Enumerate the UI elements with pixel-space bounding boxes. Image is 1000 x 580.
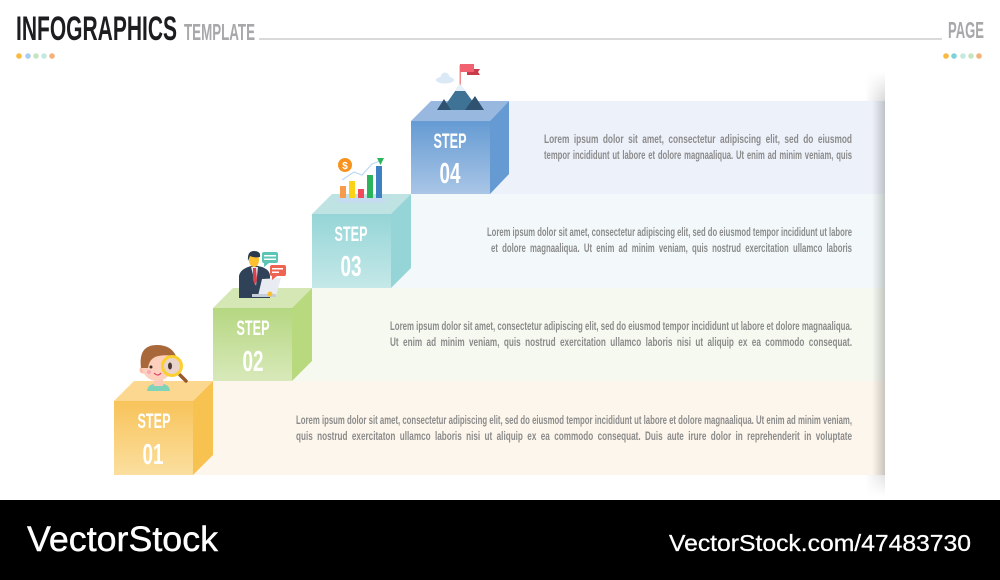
step 2 box: STEP: [236, 317, 270, 340]
step 3 box: 03: [340, 251, 362, 283]
text: step 2: [390, 321, 852, 349]
text: step 4: [544, 134, 852, 162]
footer bar: VectorStock: [27, 520, 219, 559]
dots left: [16, 53, 55, 59]
icon: child with magnifying glass: [140, 345, 186, 391]
icon: bar chart: [338, 158, 385, 203]
step 2 box: 02: [242, 346, 264, 378]
footer bar: [0, 500, 1000, 580]
band: step 1: [193, 381, 885, 475]
step 3 box: [312, 194, 411, 288]
step 4 box: STEP: [434, 130, 466, 153]
text: step 4: Lorem ipsum dolor sit amet, consectetur adipiscing elit, sed do eiusmod: [544, 134, 852, 146]
title: TEMPLATE: [184, 19, 255, 45]
step 2 box: [213, 288, 312, 381]
dots right: [943, 53, 982, 59]
footer bar: VectorStock.com/47483730: [669, 530, 971, 556]
step 4 box: [411, 101, 509, 194]
icon: mountain with flag: [436, 64, 484, 110]
band edge shading: [872, 101, 885, 475]
title: INFOGRAPHICS: [16, 10, 177, 48]
step 1 box: STEP: [138, 410, 170, 433]
text: step 4: tempor incididunt ut labore et dolore magnaaliqua. Ut enim ad minim veniam, quis: [544, 150, 852, 162]
icon: businessman with laptop: [239, 251, 286, 298]
text: step 1: [296, 415, 852, 443]
band: step 2: [292, 288, 885, 381]
page edge shadow: [865, 72, 885, 496]
text: step 3: [487, 227, 852, 255]
step 1 box: [114, 381, 213, 475]
icon: bar chart: $: [342, 161, 348, 172]
step 4 box: 04: [440, 158, 460, 190]
band: step 4: [490, 101, 885, 194]
step 3 box: STEP: [334, 223, 368, 246]
band: step 3: [391, 194, 885, 288]
step 1 box: 01: [142, 439, 164, 471]
